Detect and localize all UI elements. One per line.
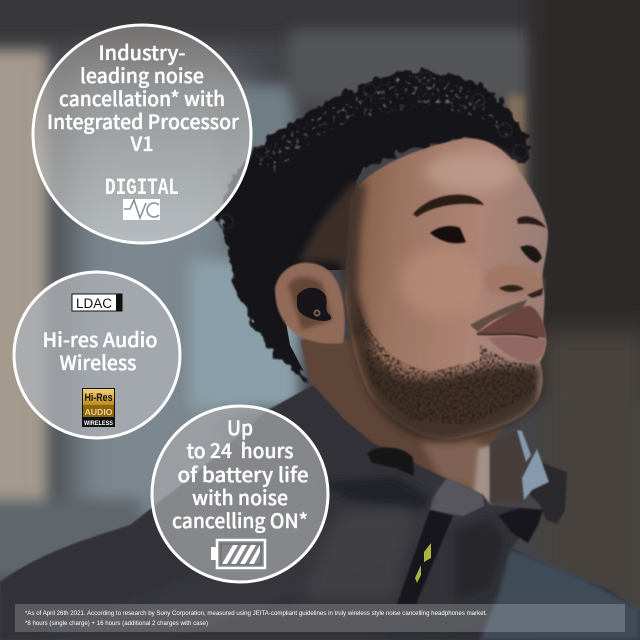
collar shadow (320, 476, 432, 510)
heading: battery life: to 24 hours (186, 435, 294, 464)
icon: LDAC logo (72, 294, 122, 311)
jacket (0, 385, 640, 640)
heading: noise cancellation: Integrated Processor (47, 106, 240, 135)
neck (300, 340, 505, 510)
earbud (297, 288, 331, 321)
heading: hi-res audio wireless: Hi-res Audio (42, 324, 158, 353)
ear with earbud (275, 263, 345, 344)
footnote panel (15, 604, 625, 632)
heading: noise cancellation: V1 (130, 128, 154, 157)
hair (218, 71, 529, 384)
curly hair outline (218, 71, 529, 384)
footnote text (25, 610, 487, 627)
fade sideburn (298, 180, 372, 345)
icon: battery (211, 540, 265, 568)
stubble texture (355, 300, 535, 425)
far eye (520, 245, 542, 263)
collar cinch (498, 508, 543, 543)
collar back (490, 430, 530, 503)
collar liner (517, 430, 549, 500)
heading: battery life: Up (227, 412, 253, 441)
beard (350, 295, 541, 442)
cheek light (400, 248, 480, 316)
panel: battery life (152, 406, 328, 582)
jacket folds (455, 520, 505, 600)
footnote text: *8 hours (single charge) + 16 hours (additional 2 charges with case) (25, 620, 208, 627)
heading: noise cancellation: leading noise (80, 60, 204, 89)
near eye (430, 226, 466, 243)
heading: battery life: cancelling ON* (172, 505, 308, 534)
heading: hi-res audio wireless (42, 324, 158, 376)
icon: LDAC logo: LDAC (76, 296, 112, 311)
jacket panel light (300, 510, 415, 600)
icon: hi-res audio wireless logo: Hi-Res (84, 392, 112, 404)
hair highlights (255, 76, 520, 175)
icon: hi-res audio wireless logo: AUDIO (84, 407, 113, 417)
footnote text: *As of April 26th 2021. According to research by Sony Corporation, measured using JEITA-compliant guidelines in truly wireless style noise cancelling headphones market. (25, 610, 487, 617)
panel: hi-res audio (14, 272, 180, 438)
nose shadow (483, 263, 543, 295)
heading: hi-res audio wireless: Wireless (60, 347, 136, 376)
far eyebrow (517, 216, 546, 228)
curls (219, 72, 527, 229)
icon: digital NC logo (105, 175, 179, 220)
heading: noise cancellation (47, 37, 240, 157)
heading: battery life (172, 412, 308, 534)
heading: battery life: with noise (192, 482, 288, 511)
panel: noise cancellation (33, 25, 251, 243)
moustache (470, 300, 527, 332)
drawcord toggle (367, 447, 414, 476)
lips (477, 306, 546, 362)
forehead light (424, 152, 516, 192)
zip (397, 510, 453, 604)
nostrils (499, 285, 543, 298)
heading: noise cancellation: Industry- (98, 37, 186, 66)
icon: hi-res audio wireless logo (82, 388, 115, 427)
near eyebrow (413, 195, 484, 217)
collar flap (530, 462, 567, 524)
icon: hi-res audio wireless logo: WIRELESS (84, 420, 114, 427)
heading: battery life: of battery life (178, 459, 308, 488)
jacket shoulder highlight (480, 550, 640, 640)
zip pull (415, 543, 431, 583)
icon: digital NC logo: DIGITAL (105, 175, 179, 201)
collar fold (430, 478, 484, 516)
face (298, 138, 548, 442)
heading: noise cancellation: cancellation* with (59, 83, 225, 112)
